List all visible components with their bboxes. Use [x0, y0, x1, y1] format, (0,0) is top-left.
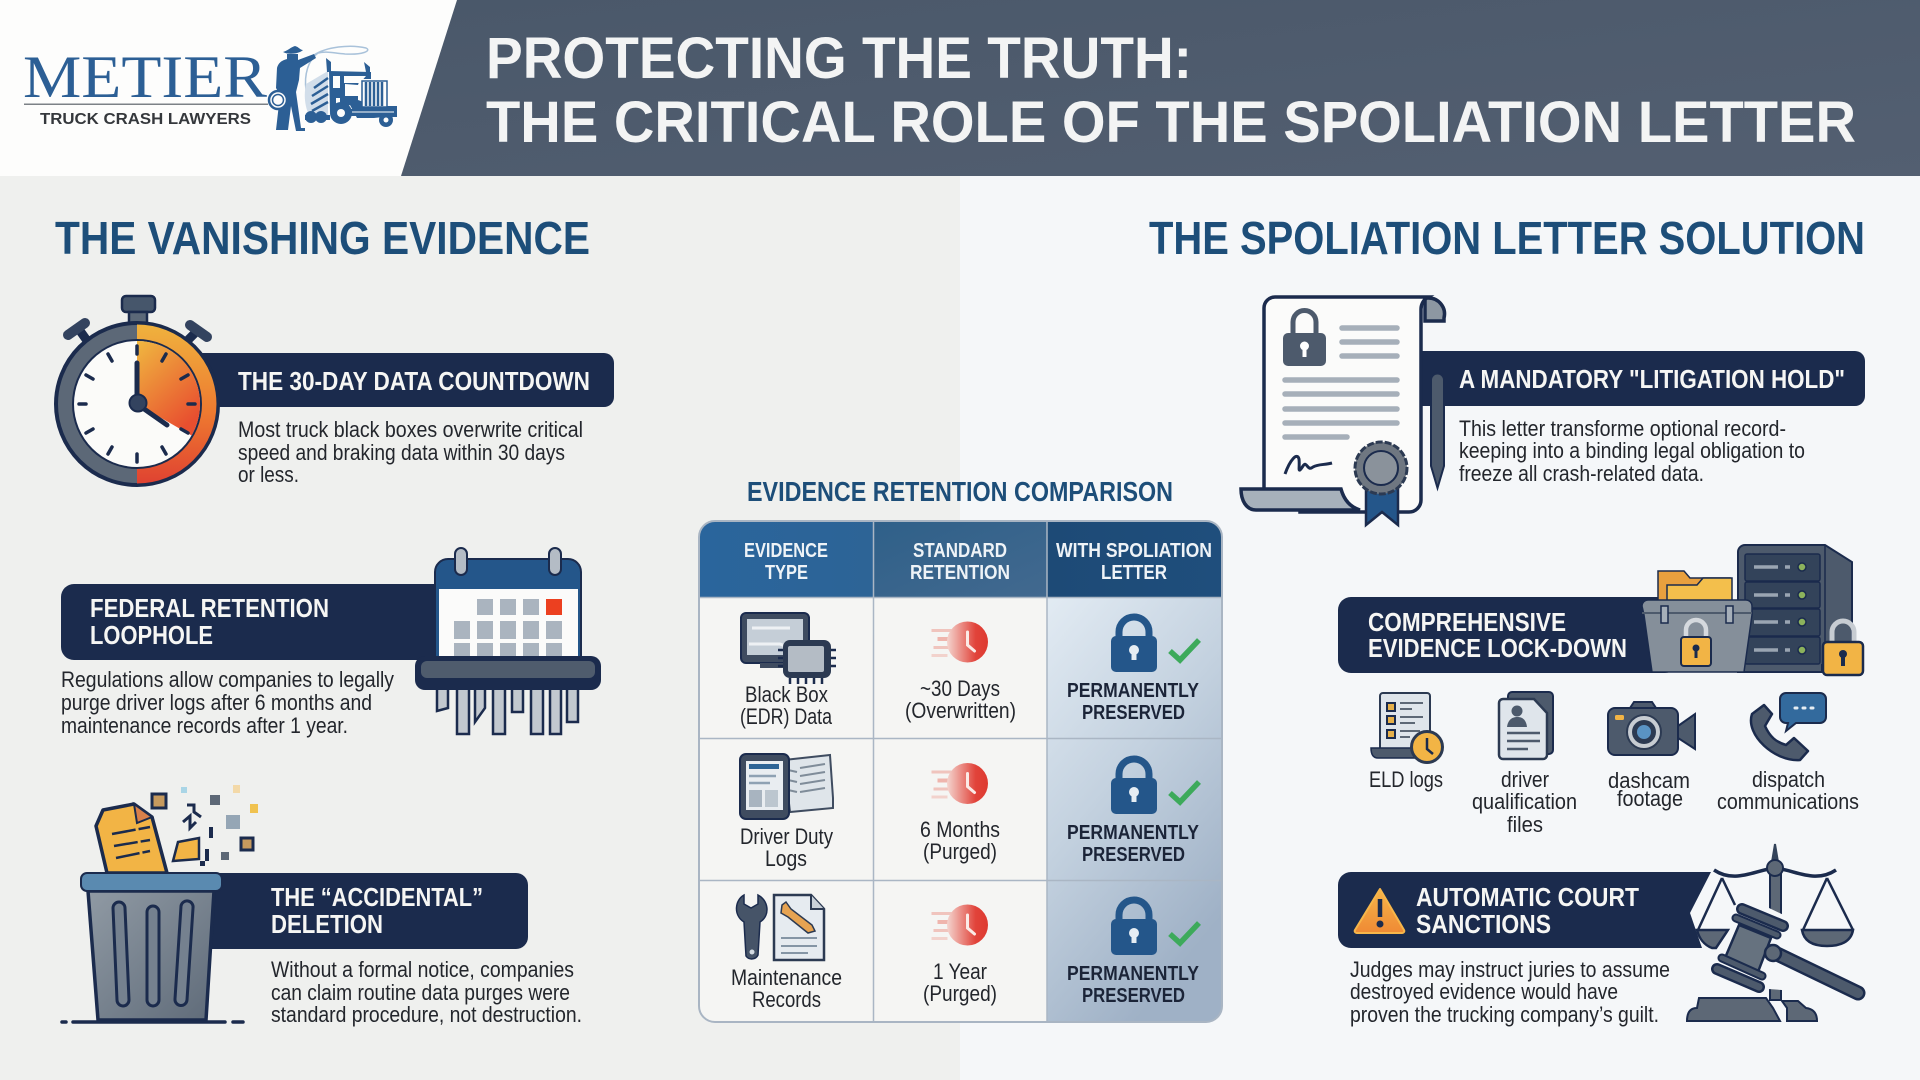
panel: mandatory litigation hold — [1241, 297, 1865, 525]
standard retention: 30 days: ~30 Days — [920, 676, 1000, 701]
bar title: DELETION — [271, 911, 383, 939]
table heading: EVIDENCE RETENTION COMPARISON — [747, 476, 1173, 507]
evidence item: dispatch communications: dispatch — [1752, 767, 1825, 792]
body text — [1350, 957, 1670, 1027]
evidence item: dashcam footage — [1608, 702, 1695, 811]
icon: letter scroll with seal and pen — [1241, 297, 1445, 525]
body text: destroyed evidence would have — [1350, 979, 1618, 1004]
header bar — [200, 873, 528, 949]
row: maintenance records — [731, 895, 842, 1012]
body text — [238, 417, 583, 487]
evidence item: dispatch communications: communications — [1717, 789, 1859, 814]
body text: can claim routine data purges were — [271, 980, 570, 1005]
icon: calendar going into shredder — [415, 548, 601, 734]
panel: federal retention loophole — [61, 548, 601, 738]
standard retention: 1 year: (Purged) — [923, 981, 997, 1006]
bar title: LOOPHOLE — [90, 622, 213, 650]
standard retention: 30 days: (Overwritten) — [905, 698, 1016, 723]
icon: ELD log tablet — [1371, 693, 1442, 762]
with letter: row 1: PERMANENTLY — [1067, 679, 1199, 702]
evidence item: driver qualification files: driver — [1501, 767, 1549, 792]
table header cells: TYPE — [765, 561, 808, 584]
evidence item: ELD logs: ELD logs — [1369, 767, 1443, 792]
table header cells: EVIDENCE — [744, 539, 828, 562]
with letter: row 1: PRESERVED — [1082, 701, 1185, 724]
header bar — [190, 353, 614, 407]
with letter: row 2: PERMANENTLY — [1067, 821, 1199, 844]
title: THE CRITICAL ROLE OF THE SPOLIATION LETTER — [486, 90, 1856, 155]
body text: proven the trucking company’s guilt. — [1350, 1002, 1659, 1027]
body text: This letter transforme optional record- — [1459, 416, 1786, 441]
header bar — [1410, 351, 1865, 406]
body text: or less. — [238, 462, 299, 487]
table header cells: STANDARD — [913, 539, 1007, 562]
standard retention: 6 months: (Purged) — [923, 839, 997, 864]
bar title: THE “ACCIDENTAL” — [271, 884, 483, 912]
table header cells: RETENTION — [910, 561, 1010, 584]
icon: cowboy and truck — [269, 46, 397, 131]
bar title — [90, 595, 329, 650]
body text: standard procedure, not destruction. — [271, 1002, 582, 1027]
with letter: row 3 — [1067, 900, 1199, 1007]
body text: purge driver logs after 6 months and — [61, 690, 372, 715]
with letter: row 2 — [1067, 759, 1199, 866]
evidence item: dashcam footage: dashcam — [1608, 768, 1690, 793]
standard retention: 30 days — [905, 622, 1016, 723]
body text: keeping into a binding legal obligation to — [1459, 438, 1805, 463]
panel: automatic court sanctions — [1338, 844, 1858, 1027]
table header cells: WITH SPOLIATION — [1056, 539, 1212, 562]
panel: 30-day data countdown — [56, 296, 614, 487]
evidence item: driver qualification files: files — [1507, 812, 1543, 837]
title: PROTECTING THE TRUTH: — [486, 26, 1192, 91]
row: driver duty logs: Logs — [765, 846, 807, 871]
table header cells: LETTER — [1101, 561, 1167, 584]
bar title: FEDERAL RETENTION — [90, 595, 329, 623]
panel: the accidental deletion — [62, 785, 582, 1027]
logo: Metier Truck Crash Lawyers: TRUCK CRASH LAWYERS — [40, 111, 251, 128]
panel: comprehensive evidence lock-down — [1338, 545, 1863, 675]
table header cells — [744, 539, 1212, 584]
icon: server, folders, toolbox and locks — [1642, 545, 1863, 675]
icon: monitor and chip — [741, 613, 836, 684]
evidence item: driver qualification files — [1472, 692, 1577, 837]
standard retention: 1 year — [923, 904, 997, 1006]
with letter: row 2: PRESERVED — [1082, 843, 1185, 866]
bar title: A MANDATORY "LITIGATION HOLD" — [1459, 366, 1845, 394]
logo: Metier Truck Crash Lawyers: METIER — [23, 44, 267, 110]
bar title: AUTOMATIC COURT — [1416, 884, 1639, 912]
header banner — [401, 0, 1920, 176]
body text: Regulations allow companies to legally — [61, 667, 395, 692]
body text: Most truck black boxes overwrite critical — [238, 417, 583, 442]
row: driver duty logs — [740, 754, 833, 871]
title — [486, 26, 1856, 155]
icon: wrench and document — [736, 895, 824, 960]
body text — [271, 957, 582, 1027]
bar title: SANCTIONS — [1416, 911, 1551, 939]
icon: scales of justice and gavel — [1687, 844, 1858, 1021]
row: maintenance records: Records — [752, 987, 821, 1012]
evidence item: driver qualification files: qualification — [1472, 789, 1577, 814]
evidence item: dashcam footage: footage — [1617, 786, 1683, 811]
with letter: row 1 — [1067, 617, 1199, 724]
comparison table — [699, 521, 1222, 1022]
header bar — [1338, 597, 1678, 673]
icon: warning triangle — [1355, 889, 1404, 933]
header bar — [61, 584, 451, 660]
row: black box: Black Box — [745, 682, 828, 707]
body text — [61, 667, 395, 738]
body text: Judges may instruct juries to assume — [1350, 957, 1670, 982]
evidence item: dispatch communications — [1717, 693, 1859, 814]
header bar — [1338, 872, 1711, 948]
table background and grid — [699, 521, 1222, 1022]
row: black box: (EDR) Data — [740, 704, 833, 729]
standard retention: 6 months: 6 Months — [920, 817, 1000, 842]
heading: The Vanishing Evidence: THE VANISHING EVIDENCE — [55, 212, 590, 264]
icon: stopwatch — [56, 296, 218, 485]
row: driver duty logs: Driver Duty — [740, 824, 833, 849]
body text — [1459, 416, 1805, 486]
body text: Without a formal notice, companies — [271, 957, 574, 982]
evidence item: ELD logs — [1369, 693, 1443, 792]
bar title: COMPREHENSIVE — [1368, 609, 1566, 637]
bar title — [1368, 609, 1627, 663]
icon: tablet and logbook — [740, 754, 833, 819]
with letter: row 3: PRESERVED — [1082, 984, 1185, 1007]
body text: freeze all crash-related data. — [1459, 461, 1704, 486]
standard retention: 1 year: 1 Year — [933, 959, 987, 984]
icon: phone and message bubble — [1751, 693, 1826, 760]
icon: driver file — [1499, 692, 1553, 759]
logo: Metier Truck Crash Lawyers — [23, 44, 397, 131]
bar title — [1416, 884, 1639, 939]
row: maintenance records: Maintenance — [731, 965, 842, 990]
standard retention: 6 months — [920, 763, 1000, 864]
row: black box — [740, 613, 836, 729]
body text: maintenance records after 1 year. — [61, 713, 348, 738]
bar title — [271, 884, 483, 939]
bar title: THE 30-DAY DATA COUNTDOWN — [238, 368, 590, 396]
with letter: row 3: PERMANENTLY — [1067, 962, 1199, 985]
icon: trash can with dissolving file — [62, 785, 258, 1022]
bar title: EVIDENCE LOCK-DOWN — [1368, 635, 1627, 663]
icon: dashcam — [1608, 702, 1695, 755]
body text: speed and braking data within 30 days — [238, 440, 565, 465]
